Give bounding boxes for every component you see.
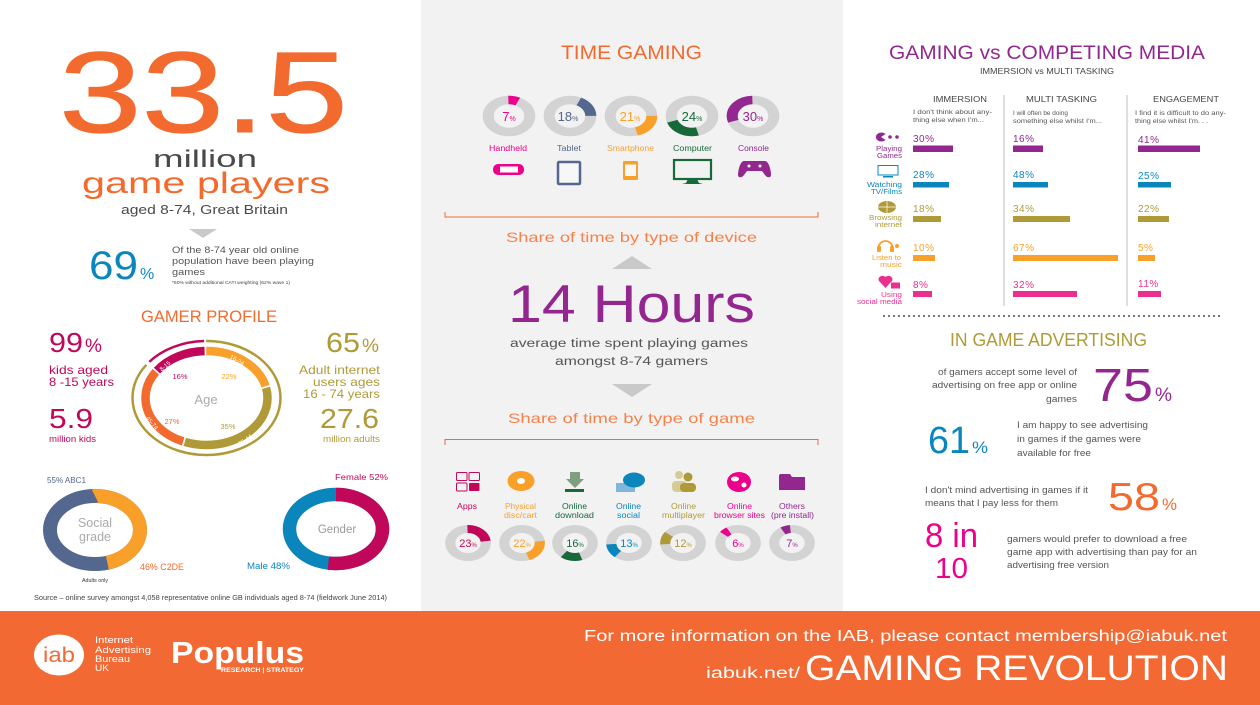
chart: social grade donut: 55% ABC1 bbox=[47, 475, 86, 485]
headline number: 33.5 bbox=[59, 29, 348, 157]
chart: age donut: 22% bbox=[221, 372, 237, 381]
row: playing games: Playing bbox=[876, 146, 902, 153]
column headings: thing else when I'm... bbox=[913, 117, 984, 124]
device: tablet: Tablet bbox=[557, 144, 582, 153]
chart: gender donut: Female 52% bbox=[335, 472, 388, 482]
row: playing games: Games bbox=[877, 153, 903, 160]
stat: kids bbox=[49, 327, 114, 444]
game: online download: Online bbox=[562, 502, 588, 511]
row: using social media bbox=[857, 276, 1161, 306]
device: console: 30% bbox=[743, 109, 763, 124]
row: listen to music: Listen to bbox=[872, 255, 901, 262]
stat: adults: 27.6 bbox=[320, 403, 379, 434]
row: watching tv: 25% bbox=[1138, 171, 1160, 182]
stat: kids: 8 -15 years bbox=[49, 375, 114, 389]
caption: share by game: Share of time by type of game bbox=[508, 410, 755, 426]
stat: kids: million kids bbox=[49, 434, 97, 444]
chart: age donut: 8-15 bbox=[159, 360, 173, 373]
row: playing games: 41% bbox=[1138, 135, 1160, 146]
row: listen to music bbox=[872, 241, 1155, 269]
heading: time gaming: TIME GAMING bbox=[561, 43, 702, 64]
heading: in game advertising: IN GAME ADVERTISING bbox=[950, 330, 1147, 350]
row: watching tv: Watching bbox=[867, 182, 902, 189]
bracket: game bbox=[445, 440, 818, 445]
device: smartphone bbox=[607, 100, 655, 180]
caption: average time: amongst 8-74 gamers bbox=[555, 356, 708, 368]
game: apps: Apps bbox=[457, 502, 477, 511]
site link: GAMING REVOLUTION bbox=[805, 649, 1228, 688]
column headings: I find it is difficult to do any- bbox=[1135, 110, 1226, 117]
column headings: IMMERSION bbox=[933, 95, 987, 104]
online population stat: *60% without additional CATI weighting (62% wave 1) bbox=[172, 280, 291, 285]
chart: gender donut bbox=[247, 472, 388, 571]
device: handheld bbox=[488, 100, 530, 175]
panel: headline and gamer profile bbox=[34, 29, 388, 602]
stat: 58 percent: 58 bbox=[1108, 476, 1160, 519]
device: tablet: 18% bbox=[558, 109, 578, 124]
stat: 61 percent: % bbox=[972, 438, 988, 457]
arrow down bbox=[189, 229, 217, 238]
panel: time gaming bbox=[445, 43, 818, 557]
logo: iab: iab bbox=[43, 644, 75, 667]
device: console: Console bbox=[738, 144, 770, 153]
row: browsing internet: internet bbox=[875, 222, 902, 229]
stat: 75 percent bbox=[932, 359, 1172, 411]
arrow down bbox=[612, 384, 652, 397]
game: online download: 16% bbox=[566, 538, 584, 550]
stat: adults: million adults bbox=[323, 434, 381, 444]
row: using social media: 11% bbox=[1138, 279, 1159, 290]
stat: 58 percent: means that I pay less for them bbox=[925, 498, 1058, 508]
stat: 8 in 10: gamers would prefer to download a free bbox=[1007, 534, 1187, 544]
logo: iab bbox=[34, 634, 151, 676]
logo: iab: Advertising bbox=[95, 645, 151, 655]
stat: adults: users ages bbox=[313, 375, 380, 389]
stat: 8 in 10: game app with advertising than pay for an bbox=[1007, 547, 1197, 557]
device: handheld: 7% bbox=[502, 109, 516, 124]
stat: 61 percent: available for free bbox=[1017, 448, 1091, 458]
caption: share by device: Share of time by type of device bbox=[506, 229, 757, 245]
column headings: I will often be doing bbox=[1013, 110, 1068, 117]
stat: adults: 65 bbox=[326, 327, 360, 358]
headline: 14 hours: 14 Hours bbox=[508, 275, 755, 334]
logo: iab: Bureau bbox=[95, 654, 130, 664]
online population stat: population have been playing bbox=[172, 256, 314, 267]
stat: 75 percent: advertising on free app or online bbox=[932, 380, 1077, 390]
game: online social bbox=[611, 472, 647, 557]
chart: age donut: 27% bbox=[164, 417, 180, 426]
heading: competing media: GAMING vs COMPETING MEDIA bbox=[889, 43, 1205, 64]
device: console bbox=[732, 100, 774, 177]
row: browsing internet: 22% bbox=[1138, 204, 1160, 215]
stat: 58 percent: I don't mind advertising in games if it bbox=[925, 485, 1089, 495]
game: online download: download bbox=[555, 511, 594, 520]
chart: age donut: 16% bbox=[172, 372, 188, 381]
column headings: something else whilst I'm... bbox=[1013, 118, 1102, 125]
game: physical disc: 22% bbox=[513, 538, 531, 550]
stat: kids: 99 bbox=[49, 327, 83, 358]
stat: kids: kids aged bbox=[49, 363, 108, 377]
stat: kids: 5.9 bbox=[49, 403, 93, 434]
game: physical disc: disc/cart bbox=[504, 511, 538, 520]
logo: iab: Internet bbox=[95, 635, 134, 645]
source note: Source – online survey amongst 4,058 representative online GB individuals aged 8-74 (fieldwork June 2014) bbox=[34, 593, 387, 602]
stat: adults bbox=[299, 327, 381, 444]
online population stat bbox=[89, 244, 314, 288]
caption: average time bbox=[510, 338, 748, 368]
chart: social grade donut: Adults only bbox=[82, 578, 109, 584]
row: browsing internet: Browsing bbox=[869, 215, 902, 222]
online population stat: Of the 8-74 year old online bbox=[172, 245, 299, 256]
game: physical disc bbox=[504, 471, 540, 557]
stat: 75 percent: 75 bbox=[1093, 359, 1153, 411]
chart: social grade donut bbox=[47, 475, 184, 584]
game: physical disc: Physical bbox=[505, 502, 536, 511]
stat: adults: % bbox=[362, 336, 379, 357]
row: listen to music: 10% bbox=[913, 243, 935, 254]
device: computer: 24% bbox=[682, 109, 702, 124]
column headings: I don't think about any- bbox=[913, 109, 992, 116]
row: watching tv: 48% bbox=[1013, 170, 1035, 181]
logo: iab: UK bbox=[95, 663, 109, 673]
chart: social grade donut: 46% C2DE bbox=[140, 562, 184, 572]
row: browsing internet bbox=[869, 201, 1169, 229]
row: browsing internet: 34% bbox=[1013, 204, 1035, 215]
stat: 58 percent bbox=[925, 476, 1177, 519]
chart: age donut bbox=[132, 341, 280, 455]
stat: 61 percent bbox=[928, 420, 1148, 462]
site link: iabuk.net/ bbox=[706, 665, 801, 682]
device: handheld: Handheld bbox=[489, 144, 527, 153]
game: others: 7% bbox=[786, 538, 798, 550]
stat: 61 percent: 61 bbox=[928, 420, 970, 462]
stat: 58 percent: % bbox=[1162, 495, 1177, 514]
device: computer bbox=[671, 100, 713, 184]
game: others bbox=[771, 474, 814, 557]
stat: 8 in 10: 10 bbox=[935, 553, 968, 585]
game: online multiplayer bbox=[662, 471, 705, 557]
stat: 75 percent: of gamers accept some level of bbox=[938, 367, 1078, 377]
game: online download bbox=[555, 472, 594, 557]
caption: average time: average time spent playing games bbox=[510, 338, 748, 350]
row: using social media: social media bbox=[857, 299, 902, 306]
game: online social: Online bbox=[616, 502, 642, 511]
stat: 8 in 10 bbox=[925, 517, 1197, 585]
row: listen to music: 5% bbox=[1138, 243, 1153, 254]
column headings: ENGAGEMENT bbox=[1153, 95, 1219, 104]
stat: 75 percent: % bbox=[1155, 385, 1172, 406]
bracket: device bbox=[445, 212, 818, 217]
heading: gamer profile: GAMER PROFILE bbox=[141, 307, 277, 326]
chart: gender donut: Male 48% bbox=[247, 561, 290, 571]
chart: social grade donut: grade bbox=[79, 530, 111, 544]
game: online social: 13% bbox=[620, 538, 638, 550]
game: online multiplayer: multiplayer bbox=[662, 511, 705, 520]
row: using social media: 32% bbox=[1013, 280, 1035, 291]
panel: competing media bbox=[857, 43, 1226, 585]
chart: age donut: 45-74 bbox=[144, 416, 159, 432]
headline unit: million bbox=[153, 146, 257, 173]
dotted divider bbox=[883, 315, 1220, 317]
stat: 61 percent: I am happy to see advertising bbox=[1017, 420, 1148, 430]
row: playing games: 30% bbox=[913, 134, 935, 145]
row: using social media: 8% bbox=[913, 280, 928, 291]
chart: social grade donut: Social bbox=[78, 516, 112, 530]
row: watching tv bbox=[867, 166, 1171, 196]
row: playing games bbox=[876, 132, 1200, 160]
game: apps bbox=[450, 472, 486, 557]
column headings: MULTI TASKING bbox=[1026, 95, 1097, 104]
column headings bbox=[913, 95, 1226, 125]
column dividers bbox=[1004, 95, 1127, 306]
game: others: (pre install) bbox=[771, 511, 814, 520]
online population stat: 69 bbox=[89, 244, 138, 288]
game: apps: 23% bbox=[459, 538, 477, 550]
game: online browser sites bbox=[714, 472, 765, 557]
footer bbox=[0, 611, 1260, 705]
game: online multiplayer: 12% bbox=[674, 538, 692, 550]
row: listen to music: 67% bbox=[1013, 243, 1035, 254]
row: watching tv: 28% bbox=[913, 170, 935, 181]
headline subject: game players bbox=[82, 167, 330, 200]
stat: kids: % bbox=[85, 336, 102, 357]
device: computer: Computer bbox=[673, 144, 712, 153]
stat: 61 percent: in games if the games were bbox=[1017, 434, 1141, 444]
stat: adults: Adult internet bbox=[299, 363, 381, 377]
row: listen to music: music bbox=[880, 262, 903, 269]
stat: adults: 16 - 74 years bbox=[303, 387, 380, 401]
device: smartphone: 21% bbox=[620, 109, 640, 124]
game: online multiplayer: Online bbox=[671, 502, 697, 511]
chart: age donut: 35% bbox=[220, 422, 236, 431]
chart: gender donut: Gender bbox=[318, 524, 356, 536]
subheading: IMMERSION vs MULTI TASKING bbox=[980, 67, 1114, 76]
row: browsing internet: 18% bbox=[913, 204, 935, 215]
game: online social: social bbox=[617, 511, 640, 520]
column headings: thing else whilst I'm. . . bbox=[1135, 118, 1208, 125]
game: online browser sites: browser sites bbox=[714, 511, 765, 520]
logo: populus: RESEARCH | STRATEGY bbox=[221, 668, 304, 674]
chart: age donut: 35-44 bbox=[238, 434, 254, 448]
game: others: Others bbox=[779, 502, 805, 511]
device: smartphone: Smartphone bbox=[607, 144, 655, 153]
chart: age donut: 16-24 bbox=[228, 354, 245, 368]
chart: age donut: Age bbox=[194, 392, 218, 407]
online population stat: % bbox=[140, 266, 154, 283]
stat: 8 in 10: 8 in bbox=[925, 517, 978, 555]
game: online browser sites: 6% bbox=[732, 538, 744, 550]
row: watching tv: TV/Films bbox=[871, 189, 903, 196]
logo: populus: Populus bbox=[171, 635, 304, 670]
row: playing games: 16% bbox=[1013, 134, 1035, 145]
online population stat: games bbox=[172, 267, 205, 278]
headline age range: aged 8-74, Great Britain bbox=[121, 203, 288, 217]
game: online browser sites: Online bbox=[727, 502, 753, 511]
stat: 75 percent: games bbox=[1046, 394, 1078, 404]
arrow up bbox=[612, 256, 652, 269]
row: using social media: Using bbox=[881, 292, 902, 299]
stat: 8 in 10: advertising free version bbox=[1007, 560, 1109, 570]
contact line: For more information on the IAB, please contact membership@iabuk.net bbox=[584, 628, 1228, 645]
device: tablet bbox=[549, 100, 591, 184]
